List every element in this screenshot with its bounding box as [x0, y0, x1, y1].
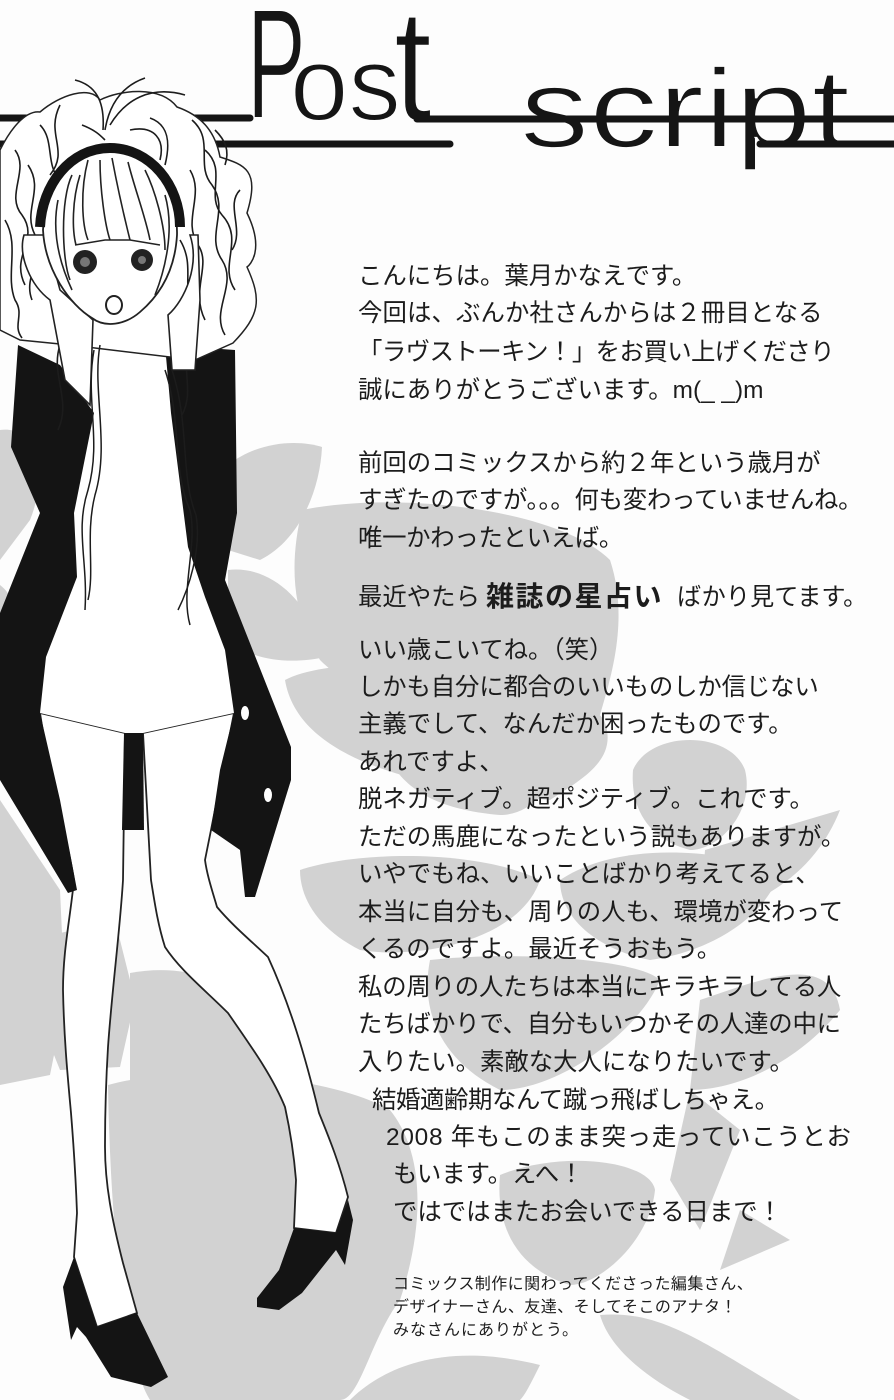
letter text block: あれですよ、 — [358, 749, 504, 776]
letter text block: いやでもね、いいことばかり考えてると、 — [358, 861, 820, 888]
letter text block: いい歳こいてね。（笑） — [358, 637, 613, 664]
letter text block: ではではまたお会いできる日まで！ — [393, 1199, 782, 1226]
letter text block: デザイナーさん、友達、そしてそこのアナタ！ — [393, 1299, 737, 1316]
figure torso — [40, 345, 234, 733]
title: Post script with double rule — [0, 0, 894, 171]
double rule — [0, 118, 894, 144]
title lettering — [247, 0, 850, 171]
letter text block: 脱ネガティブ。超ポジティブ。これです。 — [358, 786, 814, 813]
arms and hands — [22, 235, 200, 405]
letter text block: 私の周りの人たちは本当にキラキラしてる人 — [358, 974, 841, 1001]
cardigan — [0, 345, 291, 897]
letter text block: 入りたい。素敵な大人になりたいです。 — [358, 1049, 794, 1076]
letter text block: 前回のコミックスから約２年という歳月が — [358, 450, 821, 477]
letter text block: 最近やたら — [358, 584, 480, 611]
face and headband — [40, 148, 180, 324]
shoes — [63, 1200, 353, 1387]
letter text block: ばかり見てます。 — [677, 584, 867, 611]
letter text block: コミックス制作に関わってくださった編集さん、 — [393, 1276, 753, 1293]
letter text block: ただの馬鹿になったという説もありますが。 — [358, 824, 845, 851]
letter text block: すぎたのですが。。。何も変わっていませんね。 — [358, 487, 862, 514]
letter text block: たちばかりで、自分もいつかその人達の中に — [358, 1011, 841, 1038]
figure legs — [40, 713, 348, 1327]
letter text block: 雑誌の星占い — [486, 581, 663, 612]
letter text block: くるのですよ。最近そうおもう。 — [358, 936, 721, 963]
letter text block: 本当に自分も、周りの人も、環境が変わって — [358, 899, 843, 926]
letter text block: 唯一かわったといえば。 — [358, 525, 623, 552]
title lettering: os — [290, 26, 401, 143]
letter text block: 2008 年もこのまま突っ走っていこうとお — [386, 1124, 852, 1151]
illustration: standing figure in a black cardigan with curly hair — [0, 77, 353, 1387]
letter text block: もいます。えへ！ — [393, 1161, 584, 1188]
long side curls — [82, 345, 197, 625]
hair — [0, 91, 256, 360]
letter text block: 誠にありがとうございます。m(_ _)m — [358, 377, 763, 404]
letter text block: 「ラヴストーキン！」をお買い上げくださり — [358, 339, 834, 366]
letter text block: 主義でして、なんだか困ったものです。 — [358, 711, 793, 738]
letter text block: 結婚適齢期なんて蹴っ飛ばしちゃえ。 — [372, 1087, 779, 1114]
letter text block: しかも自分に都合のいいものしか信じない — [358, 674, 819, 701]
letter text block: こんにちは。葉月かなえです。 — [358, 263, 696, 290]
letter text block: みなさんにありがとう。 — [393, 1322, 579, 1339]
title lettering: script — [520, 46, 850, 171]
letter text block: 今回は、ぶんか社さんからは２冊目となる — [358, 300, 823, 327]
